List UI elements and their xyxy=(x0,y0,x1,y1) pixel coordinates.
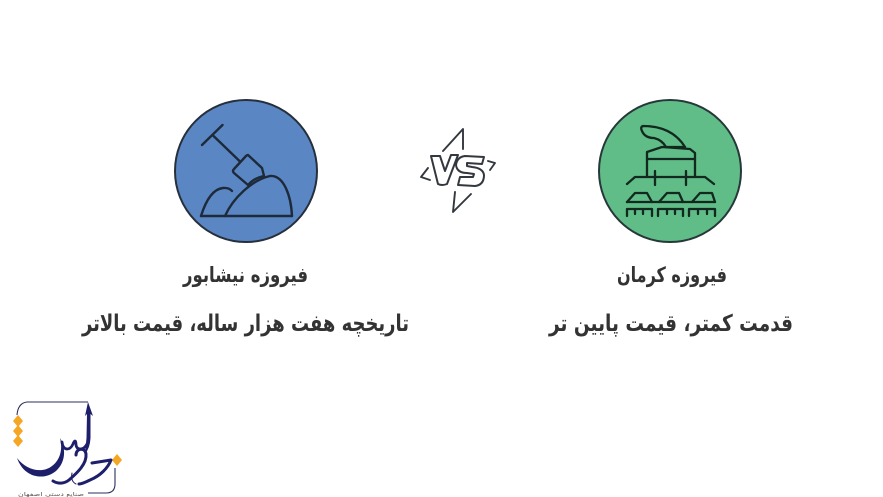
heading: Neyshabur: فیروزه نیشابور xyxy=(182,263,308,287)
logo frame xyxy=(17,402,115,493)
panel: Kerman turquoise xyxy=(548,100,793,337)
icon: mining machine xyxy=(599,100,741,242)
icon: shovel and mounds xyxy=(175,100,317,242)
panel: Neyshabur turquoise xyxy=(81,100,409,337)
text: Kerman description: قدمت کمتر، قیمت پایین تر xyxy=(548,311,793,337)
logo: Raves handicrafts xyxy=(13,402,122,497)
icon: VS xyxy=(421,129,495,212)
heading: Kerman: فیروزه کرمان xyxy=(617,263,727,287)
text: Neyshabur description: تاریخچه هفت هزار ساله، قیمت بالاتر xyxy=(81,311,409,337)
logo calligraphy strokes xyxy=(17,402,111,484)
logo ornament: orange diamonds xyxy=(13,415,122,466)
